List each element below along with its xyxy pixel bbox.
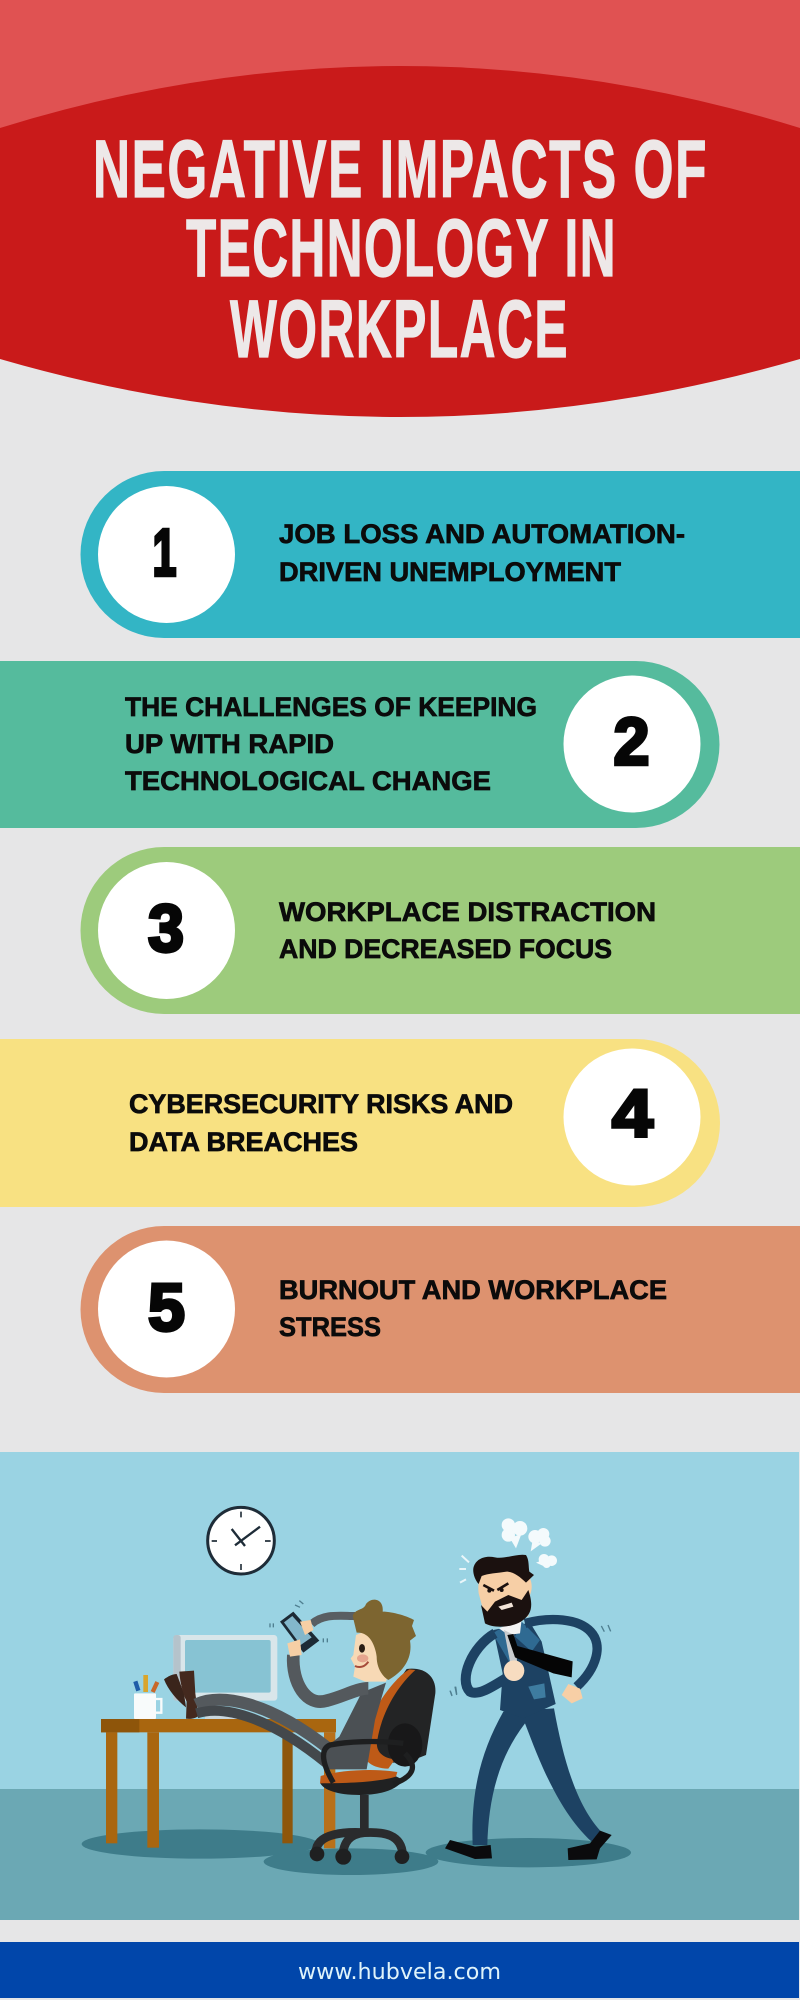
header band xyxy=(0,0,800,200)
boss head xyxy=(478,1570,532,1617)
boss shadow xyxy=(426,1838,631,1867)
panel: item 3: 3 xyxy=(148,892,184,966)
worker torso xyxy=(323,1683,386,1769)
panel: item 5: STRESS xyxy=(279,1312,381,1342)
worker head xyxy=(351,1627,397,1682)
worker far arm xyxy=(312,1616,355,1624)
anger marks xyxy=(459,1556,469,1583)
worker hands xyxy=(287,1639,302,1657)
panel: item 4: DATA BREACHES xyxy=(129,1127,358,1157)
boss legs xyxy=(472,1708,603,1845)
angry boss figure xyxy=(426,1518,631,1867)
boss eyes xyxy=(483,1583,508,1591)
panel: item 1: JOB LOSS AND AUTOMATION- xyxy=(279,519,685,549)
coffee mug with pens xyxy=(134,1675,161,1719)
panel: item 4: CYBERSECURITY RISKS AND xyxy=(129,1089,513,1119)
worker legs xyxy=(196,1700,328,1748)
panel: item 5: 5 xyxy=(148,1270,185,1346)
boss arms xyxy=(466,1633,512,1693)
panel: item 2: 2 xyxy=(614,704,650,780)
panel: item 3: AND DECREASED FOCUS xyxy=(279,934,612,964)
relaxing worker xyxy=(164,1600,457,1784)
panel: item 5 xyxy=(81,1226,800,1393)
phone xyxy=(280,1612,319,1653)
desk xyxy=(101,1719,336,1848)
title: WORKPLACE xyxy=(230,284,569,375)
panel: item 4: 4 xyxy=(612,1076,653,1152)
boss torso xyxy=(493,1623,556,1718)
motion marks xyxy=(270,1601,457,1696)
worker shoes xyxy=(164,1674,186,1707)
boss beard xyxy=(481,1590,531,1627)
boss hair xyxy=(473,1555,534,1584)
footer website: www.hubvela.com xyxy=(298,1960,501,1985)
floor shadows xyxy=(82,1829,438,1875)
icon: wall clock xyxy=(208,1507,274,1574)
illustration wall xyxy=(0,1452,799,1790)
illustration: office scene xyxy=(0,1452,799,1920)
boss hands xyxy=(504,1660,524,1681)
worker near arm xyxy=(293,1655,368,1702)
panel: item 2 xyxy=(0,661,720,828)
panel: item 2: THE CHALLENGES OF KEEPING xyxy=(125,692,537,722)
panel: item 1: DRIVEN UNEMPLOYMENT xyxy=(279,557,621,587)
computer monitor xyxy=(173,1635,277,1719)
title xyxy=(93,124,708,375)
chair xyxy=(310,1669,435,1865)
chair armrest xyxy=(324,1742,412,1784)
boss shoes xyxy=(445,1840,492,1859)
panel: item 3: WORKPLACE DISTRACTION xyxy=(279,897,656,927)
footer bar xyxy=(0,1942,799,1998)
panel: item 5: BURNOUT AND WORKPLACE xyxy=(279,1275,667,1305)
panel: item 2: UP WITH RAPID xyxy=(125,729,334,759)
illustration floor xyxy=(0,1789,799,1920)
panel: item 2: TECHNOLOGICAL CHANGE xyxy=(125,766,491,796)
steam puffs xyxy=(502,1518,557,1568)
panel: item 1: 1 xyxy=(152,516,176,590)
panel: item 3 xyxy=(81,847,800,1014)
desk worker group xyxy=(82,1507,457,1875)
panel: item 1 xyxy=(81,471,800,638)
header red lens shape xyxy=(0,66,800,417)
panel: item 4 xyxy=(0,1039,720,1207)
boss shirt and tie xyxy=(499,1619,522,1635)
worker hair xyxy=(353,1600,416,1680)
